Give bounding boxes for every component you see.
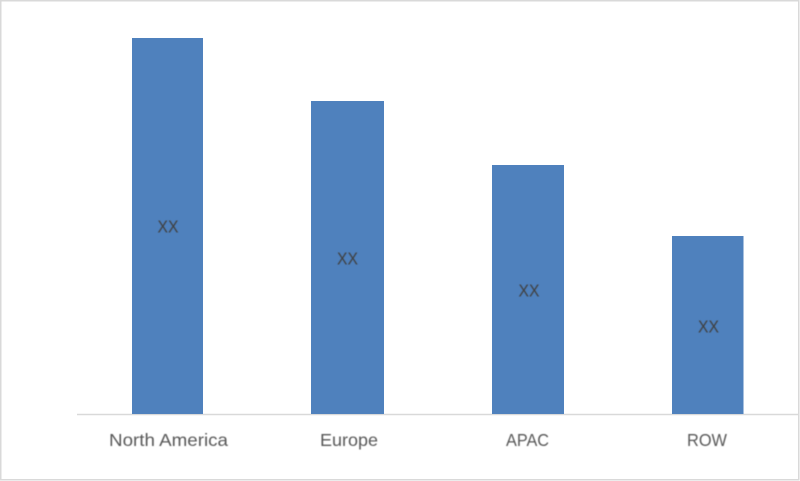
value label: North America: XX (158, 216, 179, 236)
value label: ROW: XX (698, 316, 719, 336)
axis label: North America: North America (109, 430, 228, 450)
bar: Europe (311, 101, 384, 414)
value label: APAC: XX (518, 280, 540, 300)
axis label: APAC: APAC (506, 430, 549, 450)
axis label: Europe: Europe (320, 430, 378, 450)
value label: Europe: XX (337, 248, 358, 268)
bar: North America (132, 38, 203, 414)
bar: APAC (492, 165, 564, 414)
bar: ROW (672, 236, 744, 414)
axis label: ROW: ROW (687, 430, 727, 450)
